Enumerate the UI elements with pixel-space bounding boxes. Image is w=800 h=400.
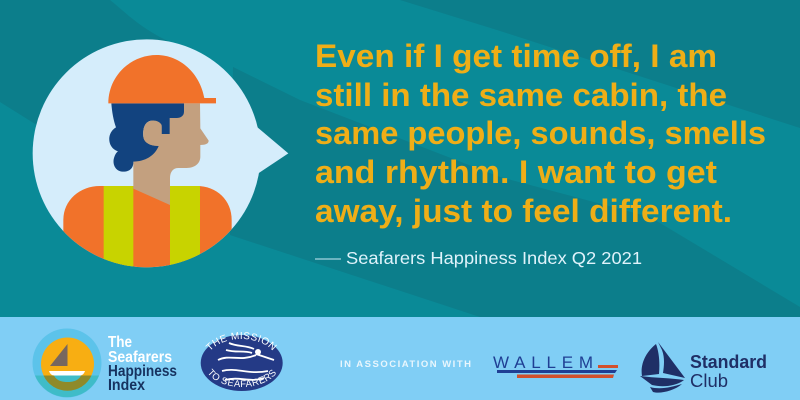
footer band	[0, 317, 800, 400]
logo: Wallem	[493, 353, 618, 378]
logo emblem	[32, 328, 102, 398]
logo: The Mission to Seafarers: TO SEAFARERS	[208, 368, 276, 387]
quote text: away, just to feel different.	[315, 193, 732, 229]
speaker illustration	[33, 39, 288, 273]
quote text: Even if I get time off, I am	[315, 38, 717, 74]
hair	[109, 103, 184, 172]
wordmark: Standard	[690, 352, 767, 372]
quote text: same people, sounds, smells	[315, 115, 766, 151]
wordmark: Club	[690, 371, 728, 391]
neck and face	[133, 103, 209, 205]
torso with hi-vis vest	[63, 186, 232, 273]
wordmark	[690, 352, 767, 391]
logo wordmark: Index	[108, 377, 145, 394]
hard hat	[108, 55, 216, 103]
ear	[143, 121, 162, 146]
quote text: and rhythm. I want to get	[315, 154, 717, 190]
logo: The Mission to Seafarers: THE MISSION	[205, 332, 277, 350]
in association with label: IN ASSOCIATION WITH	[340, 359, 471, 370]
logo wordmark: Happiness	[108, 363, 177, 380]
logo wordmark	[108, 334, 177, 394]
speech bubble	[33, 39, 288, 267]
quote text: still in the same cabin, the	[315, 77, 727, 113]
logo: Standard Club	[640, 342, 767, 393]
sailboat icon	[640, 342, 685, 393]
logo: The Mission to Seafarers	[200, 332, 283, 391]
logo: Seafarers Happiness Index	[32, 328, 177, 398]
logo: Wallem: WALLEM	[493, 353, 593, 372]
quote text	[315, 38, 766, 229]
attribution: Seafarers Happiness Index Q2 2021	[346, 248, 642, 268]
logo wordmark: Seafarers	[108, 349, 172, 366]
logo wordmark: The	[108, 334, 132, 351]
